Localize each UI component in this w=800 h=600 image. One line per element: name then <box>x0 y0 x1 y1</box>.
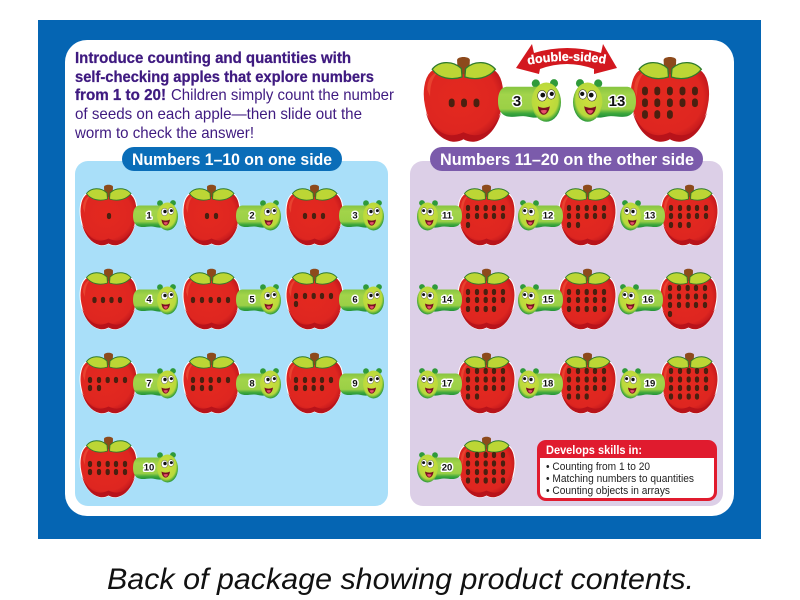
apple 11: 11 <box>442 210 453 222</box>
apple 3: 3 <box>352 210 358 222</box>
apple 19 <box>620 353 718 413</box>
apple 18 <box>518 353 616 413</box>
apple 8 <box>183 353 281 413</box>
apple 5 <box>183 269 281 329</box>
apple 9: 9 <box>352 378 358 390</box>
intro text: Children simply count the number <box>171 87 394 104</box>
apple 1 <box>80 185 178 245</box>
apple 18: 18 <box>543 378 553 390</box>
apple 2: 2 <box>249 210 255 222</box>
apple 13: 13 <box>645 210 655 222</box>
apple 12: 12 <box>543 210 553 222</box>
apple 7 <box>80 353 178 413</box>
double-sided arrow banner <box>516 44 617 74</box>
callout: develops skills <box>537 440 717 501</box>
intro text: from 1 to 20! <box>75 87 166 104</box>
intro text: worm to check the answer! <box>74 125 254 142</box>
apple 6: 6 <box>352 294 358 306</box>
apple 2 <box>183 185 281 245</box>
apple 17 <box>417 353 515 413</box>
apple 13 <box>620 185 718 245</box>
apple 6 <box>286 269 384 329</box>
apple 14 <box>417 269 515 329</box>
apple 5: 5 <box>249 294 255 306</box>
intro text <box>74 50 394 142</box>
apple 19: 19 <box>645 378 655 390</box>
apple 4: 4 <box>146 294 152 306</box>
large apple with worm: 3 <box>423 57 561 142</box>
callout: develops skills: Develops skills in: <box>546 443 642 457</box>
apple 1: 1 <box>146 210 152 222</box>
apple 15: 15 <box>543 294 554 306</box>
heading: numbers 11-20: Numbers 11–20 on the other side <box>440 150 694 169</box>
apple 12 <box>518 185 616 245</box>
apple 3 <box>286 185 384 245</box>
heading: numbers 1-10: Numbers 1–10 on one side <box>132 150 332 169</box>
large apple with worm: 3: 3 <box>513 93 521 110</box>
intro text: Introduce counting and quantities with <box>75 50 351 67</box>
callout: develops skills: • Matching numbers to quantities <box>546 473 694 485</box>
double-sided arrow banner: double-sided <box>528 52 606 64</box>
intro text: of seeds on each apple—then slide out the <box>75 106 362 123</box>
apple 20: 20 <box>442 462 452 474</box>
large apple with worm: 13 <box>573 57 710 142</box>
apple 16: 16 <box>643 294 653 306</box>
apple 11 <box>417 185 515 245</box>
apple 16 <box>618 269 717 329</box>
apple 4 <box>80 269 178 329</box>
apple 14: 14 <box>442 294 453 306</box>
intro text: self-checking apples that explore numbers <box>75 69 374 86</box>
apple 10: 10 <box>144 462 154 474</box>
panel: numbers 11 to 20 <box>410 161 723 506</box>
apple 15 <box>518 269 616 329</box>
large apple with worm: 13: 13 <box>609 93 625 110</box>
white content card <box>65 40 734 516</box>
blue package frame <box>38 20 761 539</box>
panel: numbers 1 to 10 <box>75 161 388 506</box>
apple 8: 8 <box>249 378 255 390</box>
apple 20 <box>417 437 515 497</box>
callout: develops skills: • Counting objects in arrays <box>546 485 670 497</box>
apple 9 <box>286 353 384 413</box>
apple 17: 17 <box>442 378 452 390</box>
apple 10 <box>80 437 178 497</box>
apple 7: 7 <box>146 378 152 390</box>
callout: develops skills: • Counting from 1 to 20 <box>546 461 650 473</box>
caption: Back of package showing product contents. <box>107 563 694 596</box>
